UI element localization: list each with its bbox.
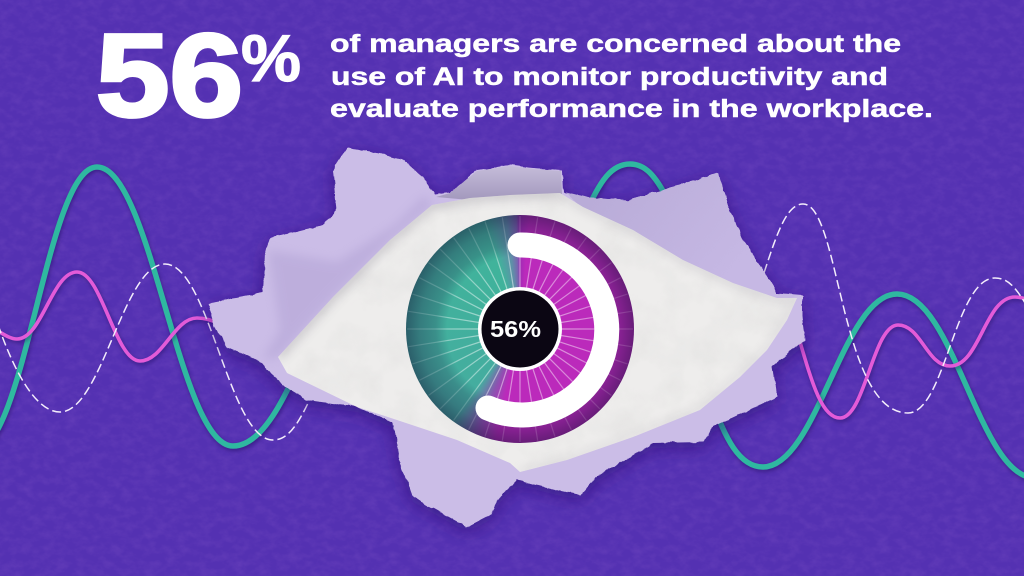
dial centre with percentage: 56% (490, 316, 541, 342)
wave: dashed white line (0, 204, 1024, 440)
headline statistic: 56 (96, 10, 243, 142)
dial centre with percentage (478, 287, 562, 371)
upper right curled flap (565, 173, 801, 300)
statement text: of managers are concerned about the (330, 30, 901, 58)
statement text (330, 30, 933, 123)
wave: teal line (0, 164, 1024, 478)
white crumpled paper interior (270, 185, 810, 480)
statement text: use of AI to monitor productivity and (331, 63, 888, 91)
dial tick lines (407, 216, 633, 442)
torn paper hole (208, 148, 810, 527)
upper curled band (436, 166, 562, 200)
shadow under torn paper (208, 153, 805, 532)
torn lilac paper edge (208, 148, 805, 527)
paper fold shadow on left flap (262, 195, 432, 360)
wave: magenta line (0, 272, 1024, 418)
eye iris: teal and magenta dial (406, 215, 634, 443)
statement text: evaluate performance in the workplace. (330, 95, 933, 123)
white progress arc (488, 245, 607, 415)
headline statistic: % (241, 21, 301, 95)
headline statistic (96, 10, 301, 142)
